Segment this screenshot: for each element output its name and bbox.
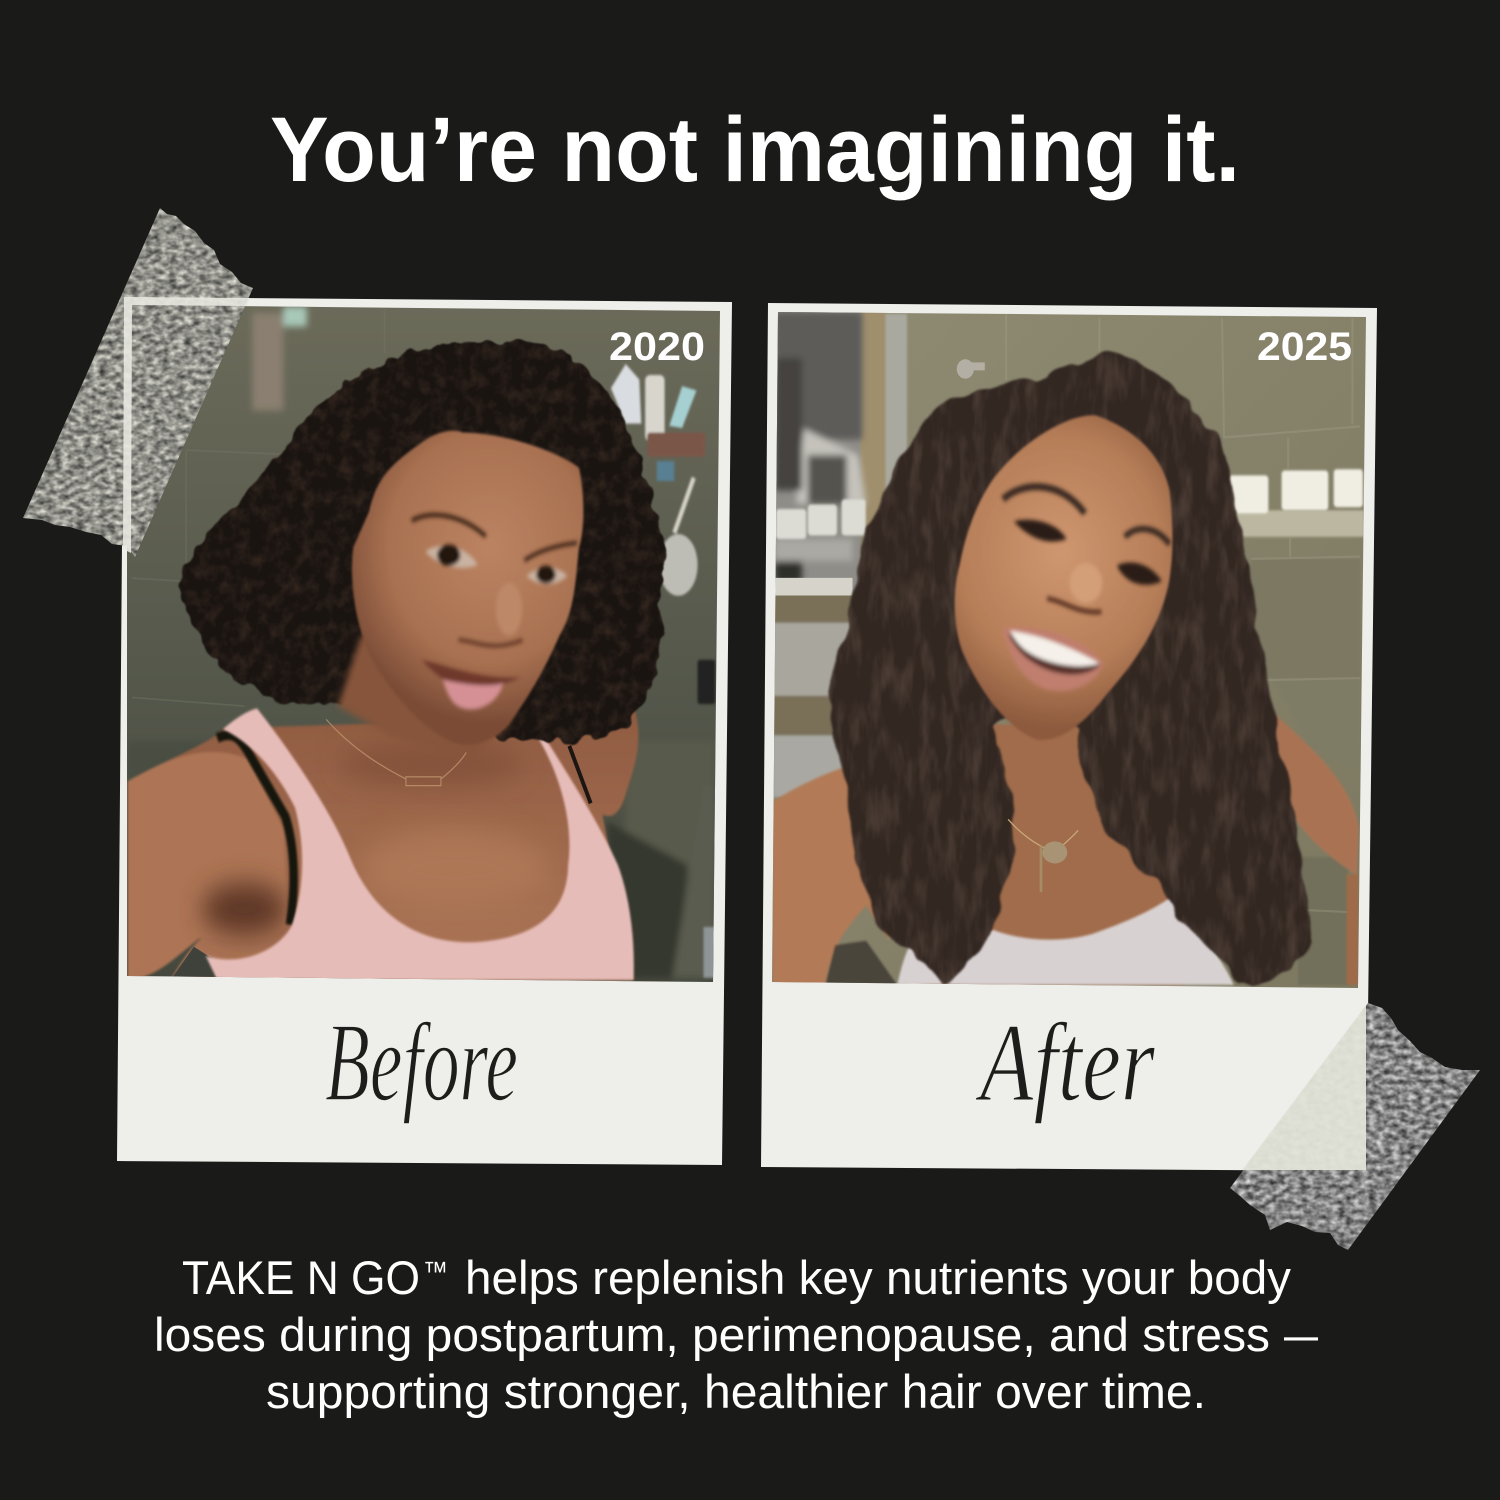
polaroid card: before xyxy=(117,297,732,1165)
body text: — xyxy=(1284,1308,1318,1361)
title: You’re not imagining it. xyxy=(270,99,1240,201)
body text: helps replenish key nutrients your body xyxy=(465,1251,1291,1304)
body text xyxy=(154,1251,1318,1418)
wall and tile details xyxy=(773,312,1364,985)
necklace xyxy=(326,719,466,786)
body text: loses during postpartum, perimenopause, and stress xyxy=(154,1308,1270,1361)
tile grout lines xyxy=(132,460,244,707)
tape: bottom right xyxy=(1230,1003,1480,1250)
pendant necklace xyxy=(1008,819,1078,892)
body text: ™ xyxy=(423,1256,448,1287)
face xyxy=(955,415,1172,740)
tile grout lines xyxy=(1006,314,1360,912)
facial features xyxy=(1002,487,1170,691)
caption: Before: Before xyxy=(325,1001,518,1125)
photo: before, woman with short curly hair in pink tank xyxy=(120,300,735,998)
facial features xyxy=(412,515,577,709)
tape overlap on card xyxy=(1242,1005,1366,1170)
long wavy hair xyxy=(831,356,1310,985)
face xyxy=(352,431,583,745)
white card border showing through tape xyxy=(123,297,250,553)
year label: 2025: 2025 xyxy=(1257,325,1352,369)
body text: supporting stronger, healthier hair over time. xyxy=(266,1365,1206,1418)
tape fibre texture xyxy=(23,208,253,557)
armpit and collarbone shadows xyxy=(202,742,548,936)
shower caddy items xyxy=(611,364,715,978)
pink tank top xyxy=(206,708,634,980)
black bra strap xyxy=(217,735,294,925)
white top xyxy=(897,897,1234,985)
under-arm dark background xyxy=(173,946,216,977)
tape: top left xyxy=(23,208,253,557)
polaroid card: after xyxy=(761,303,1377,1171)
door handle xyxy=(957,359,985,379)
panel: before polaroid xyxy=(117,297,735,1165)
neck xyxy=(335,632,516,739)
panel: after polaroid xyxy=(761,303,1380,1171)
tape fibre texture xyxy=(1230,1003,1480,1250)
shower wall details xyxy=(250,306,716,978)
caption: After: After xyxy=(975,1001,1155,1125)
curly hair xyxy=(182,341,665,741)
vanity lights xyxy=(1229,469,1363,513)
skin: chest and arms xyxy=(128,706,638,980)
photo: after, woman with long wavy hair in white top xyxy=(765,305,1380,1003)
year label: 2020: 2020 xyxy=(609,325,705,369)
shoulders and arms xyxy=(773,707,1359,985)
body text: TAKE N GO xyxy=(182,1251,420,1304)
framed picture xyxy=(775,312,866,596)
